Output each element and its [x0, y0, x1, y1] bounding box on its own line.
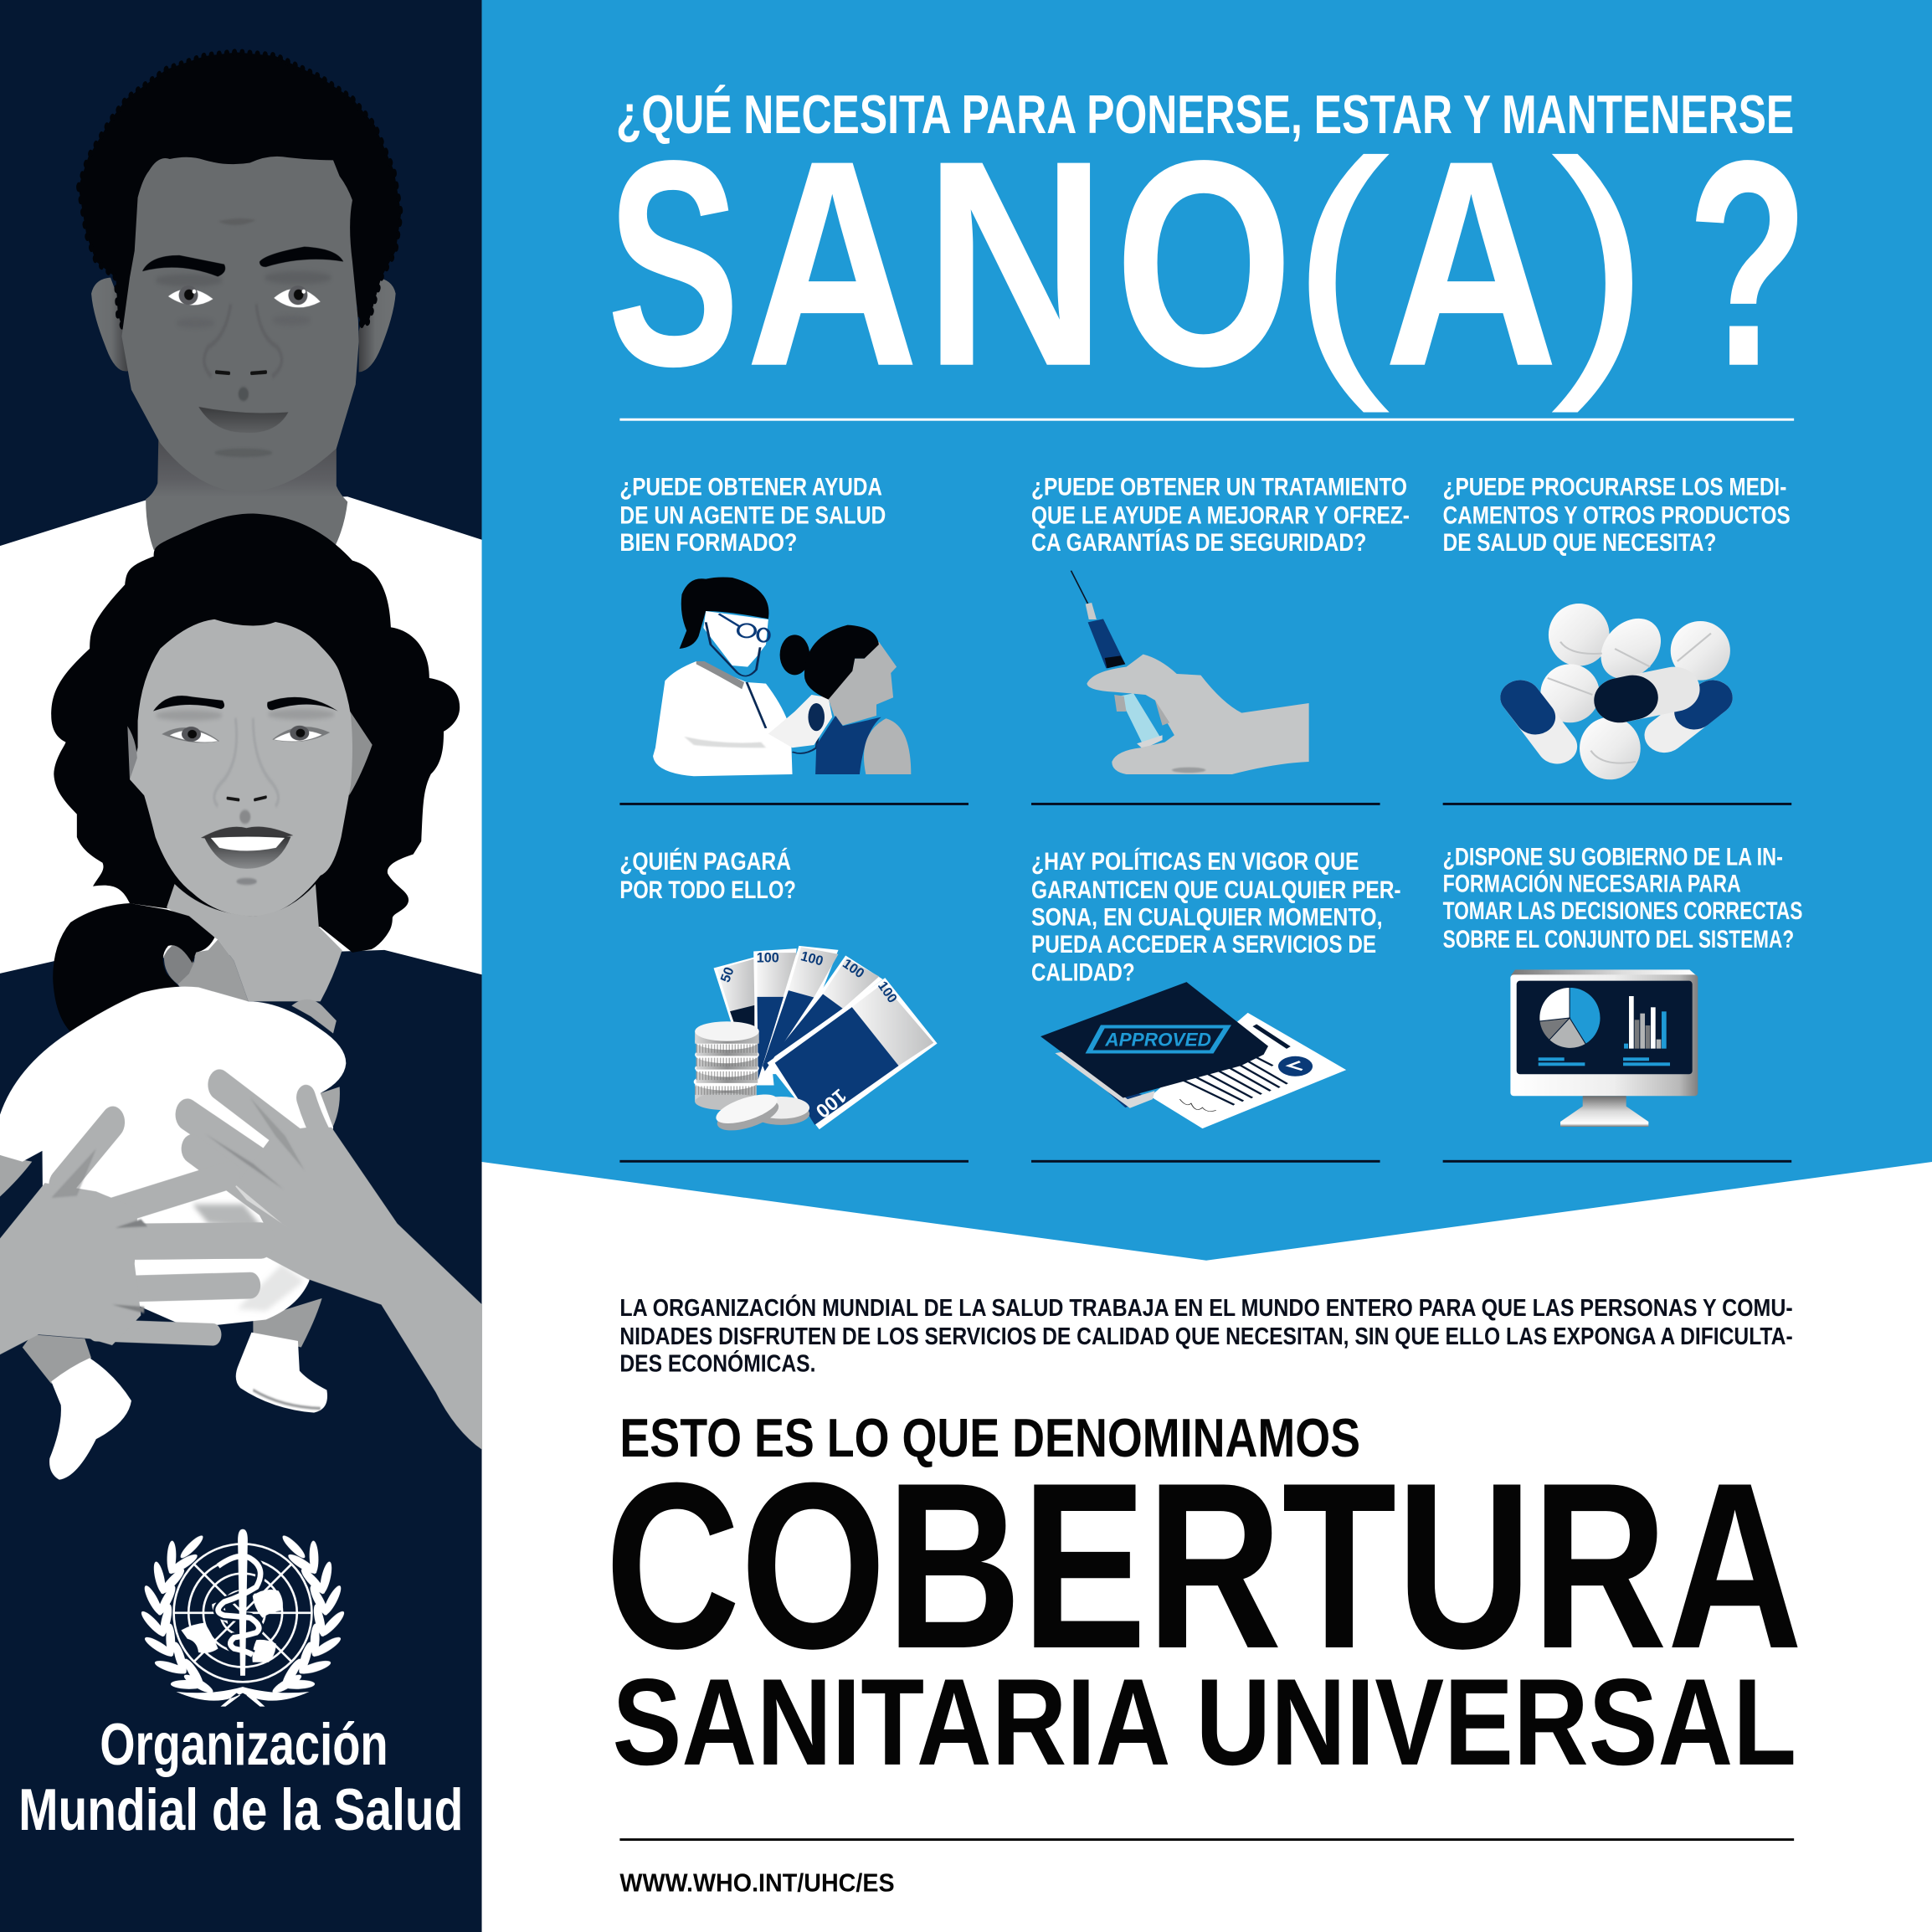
- man's eyebrows: [142, 247, 343, 276]
- question 3: ¿PUEDE PROCURARSE LOS MEDI-: [1443, 474, 1786, 501]
- document: [1150, 1013, 1346, 1128]
- screen: [1517, 981, 1693, 1074]
- bar chart: [1624, 996, 1667, 1049]
- question 1: DE UN AGENTE DE SALUD: [619, 502, 886, 530]
- question 4: POR TODO ELLO?: [619, 876, 796, 904]
- barrel: [1088, 619, 1125, 668]
- baby's legs: [23, 1298, 322, 1384]
- heading: SANO(A)?: N: [923, 100, 1107, 428]
- question 5: ¿HAY POLÍTICAS EN VIGOR QUE: [1031, 847, 1359, 876]
- doctor coat: [653, 661, 793, 776]
- heading: SANO(A)?: S: [607, 100, 740, 428]
- needle: [1071, 571, 1089, 605]
- illustration: woman portrait: [51, 514, 460, 953]
- question 1: [619, 474, 886, 557]
- continents: [181, 1590, 283, 1662]
- baby's white clothing: [0, 987, 346, 1328]
- question 5: SONA, EN CUALQUIER MOMENTO,: [1031, 903, 1383, 931]
- right capsule: [1664, 697, 1713, 735]
- question 2: ¿PUEDE OBTENER UN TRATAMIENTO: [1031, 474, 1407, 501]
- heading: esto es lo que denominamos: ESTO ES LO QUE DENOMINAMOS: [619, 1407, 1360, 1468]
- question 6: ¿DISPONE SU GOBIERNO DE LA IN-: [1443, 843, 1783, 871]
- logo: WHO emblem: [138, 1529, 347, 1707]
- stethoscope: [706, 622, 819, 753]
- folder: [1041, 982, 1268, 1097]
- patient face: [829, 642, 897, 726]
- doctor hair: [680, 577, 768, 649]
- woman's neck: [167, 884, 342, 1001]
- heading: SANO(A)?: A: [746, 100, 919, 428]
- icon: approved folder and document: [1041, 982, 1346, 1128]
- question 5: GARANTICEN QUE CUALQUIER PER-: [1031, 876, 1401, 904]
- badge: [1278, 1056, 1313, 1076]
- patient top: [815, 716, 881, 774]
- lower barrel: [1119, 693, 1160, 745]
- icon: banknotes and coins: 100: [799, 948, 825, 969]
- heading: SANO(A)?: A: [1384, 100, 1559, 428]
- shadows under fingers: [193, 1205, 305, 1311]
- text block: WHO statement: LA ORGANIZACIÓN MUNDIAL DE LA SALUD TRABAJA EN EL MUNDO ENTERO PARA QUE LAS PERSONAS Y COMU-: [619, 1293, 1793, 1322]
- screen text lines: [1539, 1057, 1670, 1066]
- man's eyes: [168, 285, 321, 307]
- question 5: CALIDAD?: [1031, 959, 1135, 987]
- hand: [1087, 655, 1309, 774]
- globe: [174, 1544, 311, 1682]
- woman's ear: [349, 710, 373, 795]
- pie chart: [1539, 987, 1601, 1048]
- ribbon: [176, 1687, 309, 1707]
- text: organization name: Mundial de la Salud: [18, 1776, 463, 1842]
- woman's eye shadows: [156, 709, 335, 721]
- heading: SANO(A)?: ): [1550, 105, 1651, 415]
- monitor stand: [1560, 1096, 1648, 1127]
- text: organization name: [18, 1711, 463, 1842]
- baby's cheek: [163, 939, 249, 1001]
- signature: [1179, 1099, 1216, 1112]
- document lines: [1182, 1051, 1287, 1105]
- center capsule: [1620, 689, 1674, 701]
- question 1: BIEN FORMADO?: [619, 529, 797, 557]
- man's eye shadows: [156, 271, 331, 328]
- left capsule: [1520, 697, 1557, 747]
- question 6: [1443, 843, 1802, 953]
- icon: syringe in hand: [1071, 571, 1309, 774]
- question 2: CA GARANTÍAS DE SEGURIDAD?: [1031, 528, 1366, 557]
- man's ears: [91, 278, 396, 373]
- round tablets: [1540, 604, 1730, 779]
- patient arm: [864, 718, 911, 774]
- text: website: WWW.WHO.INT/UHC/ES: [619, 1868, 895, 1897]
- icon: banknotes and coins: 100: [757, 951, 779, 966]
- monitor top edge: [1511, 969, 1696, 975]
- question 6: FORMACIÓN NECESARIA PARA: [1443, 870, 1741, 898]
- woman's nose: [214, 718, 279, 824]
- woman's eyes: [162, 726, 330, 742]
- icon: doctor and patient: [653, 577, 911, 776]
- question 6: TOMAR LAS DECISIONES CORRECTAS: [1443, 897, 1802, 925]
- question 3: [1443, 474, 1791, 557]
- doctor hand: [768, 695, 832, 748]
- patient hair: [804, 625, 879, 700]
- panel: left portrait column: [0, 0, 482, 1932]
- woman's face: [130, 619, 352, 916]
- staff and snake: [218, 1529, 260, 1676]
- heading: SANO(A)?: O: [1115, 100, 1293, 428]
- illustration: man portrait: [79, 53, 401, 550]
- man's white shirt: [0, 496, 482, 974]
- question 3: DE SALUD QUE NECESITA?: [1443, 529, 1716, 557]
- man's nose: [204, 305, 282, 401]
- baby's hair: [53, 903, 214, 1034]
- man's hair: [79, 53, 401, 326]
- man's neck: [146, 433, 347, 550]
- heading: SANO(A)?: (: [1290, 105, 1391, 415]
- patient bun: [780, 635, 809, 675]
- stamp: [1089, 1026, 1227, 1051]
- baby's arms: [0, 999, 340, 1196]
- bill 50: [714, 956, 774, 1085]
- right hand and arm: [188, 1085, 482, 1450]
- icon: computer monitor with charts: [1510, 969, 1698, 1127]
- text block: WHO statement: [619, 1293, 1793, 1377]
- icon: banknotes and coins: 100: [812, 1085, 850, 1123]
- icon: banknotes and coins: [694, 946, 938, 1137]
- question 5: [1031, 847, 1401, 987]
- bill 100 d: [767, 978, 938, 1129]
- icon: approved folder and document: APPROVED: [1104, 1030, 1211, 1051]
- icon: pills and capsules: [1520, 604, 1730, 779]
- question 4: ¿QUIÉN PAGARÁ: [619, 847, 791, 876]
- woman's hair: [51, 514, 460, 953]
- bill 100 a: [753, 948, 797, 1080]
- baby's ear: [164, 946, 194, 984]
- text: organization name: Organización: [100, 1711, 388, 1777]
- laurel left: [138, 1533, 215, 1696]
- loose coins: [713, 1088, 809, 1137]
- question 5: PUEDA ACCEDER A SERVICIOS DE: [1031, 931, 1376, 958]
- question 6: SOBRE EL CONJUNTO DEL SISTEMA?: [1443, 926, 1794, 953]
- question 2: QUE LE AYUDE A MEJORAR Y OFREZ-: [1031, 502, 1410, 530]
- bill 100 b: [760, 946, 839, 1074]
- laurel right: [270, 1533, 347, 1696]
- panel: blue chevron header: [482, 0, 1932, 1261]
- baby's boots: [49, 1333, 327, 1480]
- icon: banknotes and coins: 50: [718, 965, 737, 984]
- heading: SANO(A)?: [607, 100, 1809, 428]
- folder back: [1089, 1076, 1150, 1107]
- question 3: CAMENTOS Y OTROS PRODUCTOS: [1443, 502, 1791, 530]
- bill 100 c: [765, 956, 883, 1071]
- man's mouth: [198, 407, 288, 433]
- illustration: mother and baby: [0, 878, 482, 1480]
- icon: banknotes and coins: 100: [840, 956, 867, 981]
- woman's eyebrows: [153, 696, 338, 712]
- doctor glasses: [719, 614, 769, 642]
- question 4: [619, 847, 796, 904]
- icon: banknotes and coins: 100: [875, 979, 900, 1006]
- question 2: [1031, 474, 1410, 557]
- man's face: [121, 157, 359, 492]
- left hand and arm: [0, 1123, 261, 1354]
- monitor bezel: [1510, 974, 1698, 1096]
- doctor face: [703, 611, 768, 667]
- heading: SANO(A)?: ?: [1687, 100, 1809, 428]
- woman's mouth: [201, 826, 293, 869]
- coin stack: [694, 1021, 759, 1110]
- question 1: ¿PUEDE OBTENER AYUDA: [619, 474, 882, 501]
- text block: WHO statement: DES ECONÓMICAS.: [619, 1349, 815, 1377]
